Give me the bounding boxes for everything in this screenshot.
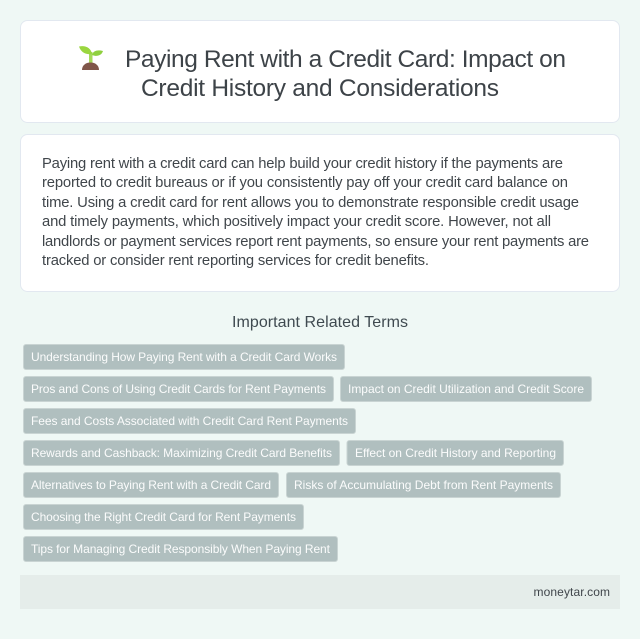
text block: description: reported to credit bureaus or if you consistently pay off your credit card balance on: [42, 175, 568, 191]
tag: Risks of Accumulating Debt from Rent Payments: [294, 478, 553, 492]
tag: Fees and Costs Associated with Credit Card Rent Payments: [31, 414, 348, 428]
tag: Alternatives to Paying Rent with a Credit Card: [31, 478, 271, 492]
tag: [24, 536, 338, 562]
tag: [24, 440, 340, 466]
title: Paying Rent with a Credit Card: Impact on: [125, 46, 566, 73]
tag: [24, 408, 356, 434]
text block: description: Paying rent with a credit card can help build your credit history if the payments are: [42, 156, 563, 172]
icon: sprout: [79, 46, 103, 70]
text block: description: time. Using a credit card for rent allows you to demonstrate responsible credit usage: [42, 195, 579, 211]
tag: [340, 376, 592, 402]
tag: [24, 344, 344, 370]
text block: description: and timely payments, which positively impact your credit score. However, not all: [42, 214, 551, 230]
heading: related terms: Important Related Terms: [232, 314, 408, 331]
tag: Impact on Credit Utilization and Credit Score: [348, 382, 584, 396]
title: Credit History and Considerations: [141, 75, 499, 102]
tag: Pros and Cons of Using Credit Cards for Rent Payments: [31, 382, 326, 396]
footer: site name: moneytar.com: [534, 585, 610, 599]
text block: description: tracked or consider rent reporting services for credit benefits.: [42, 253, 429, 269]
tag: Effect on Credit History and Reporting: [355, 446, 556, 460]
tag: [286, 472, 560, 498]
tag list: related terms: [24, 344, 592, 562]
tag: [24, 376, 334, 402]
panel: description card: [20, 134, 620, 292]
text block: description: [42, 156, 589, 269]
panel: title card: [20, 20, 620, 122]
tag: Understanding How Paying Rent with a Credit Card Works: [31, 350, 337, 364]
tag: [24, 504, 304, 530]
tag: Rewards and Cashback: Maximizing Credit Card Benefits: [31, 446, 332, 460]
footer bar: [20, 575, 620, 609]
tag: [347, 440, 564, 466]
tag: Choosing the Right Credit Card for Rent Payments: [31, 510, 296, 524]
title: [125, 46, 566, 102]
tag: Tips for Managing Credit Responsibly When Paying Rent: [31, 542, 331, 556]
tag: [24, 472, 278, 498]
text block: description: landlords or payment services report rent payments, so ensure your rent payments are: [42, 234, 589, 250]
